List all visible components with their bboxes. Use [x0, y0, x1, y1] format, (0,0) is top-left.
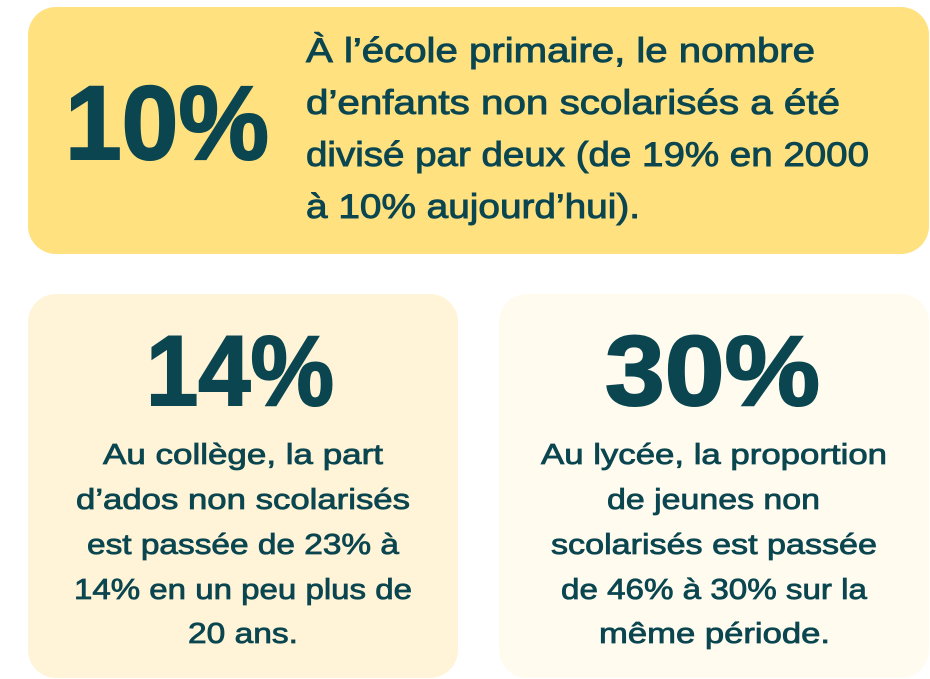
text block: primary school description [306, 32, 869, 226]
panel: primary school [28, 7, 929, 254]
text block: primary school description: À l’école primaire, le nombre [306, 32, 815, 70]
text block: middle school description: 20 ans. [188, 618, 298, 650]
text block: primary school description: d’enfants non scolarisés a été [306, 84, 840, 122]
text block: high school description: Au lycée, la proportion [541, 439, 887, 471]
panel: middle school [28, 294, 458, 678]
text block: middle school description: est passée de 23% à [87, 529, 400, 561]
statistic: 30%: 30% [605, 315, 820, 426]
text block: high school description: de 46% à 30% sur la [561, 574, 868, 606]
text block: primary school description: à 10% aujourd’hui). [306, 188, 640, 226]
panel: high school [499, 294, 929, 678]
text block: high school description [541, 439, 887, 650]
text block: middle school description: 14% en un peu plus de [74, 574, 412, 606]
text block: middle school description [74, 439, 412, 650]
text block: high school description: scolarisés est passée [551, 529, 877, 561]
text block: high school description: de jeunes non [607, 484, 820, 516]
text block: high school description: même période. [599, 618, 830, 650]
text block: middle school description: d’ados non scolarisés [76, 484, 410, 516]
statistic: 10%: 10% [65, 65, 269, 182]
text block: middle school description: Au collège, la part [103, 439, 383, 471]
text block: primary school description: divisé par deux (de 19% en 2000 [306, 136, 869, 174]
statistic: 14%: 14% [146, 315, 334, 426]
